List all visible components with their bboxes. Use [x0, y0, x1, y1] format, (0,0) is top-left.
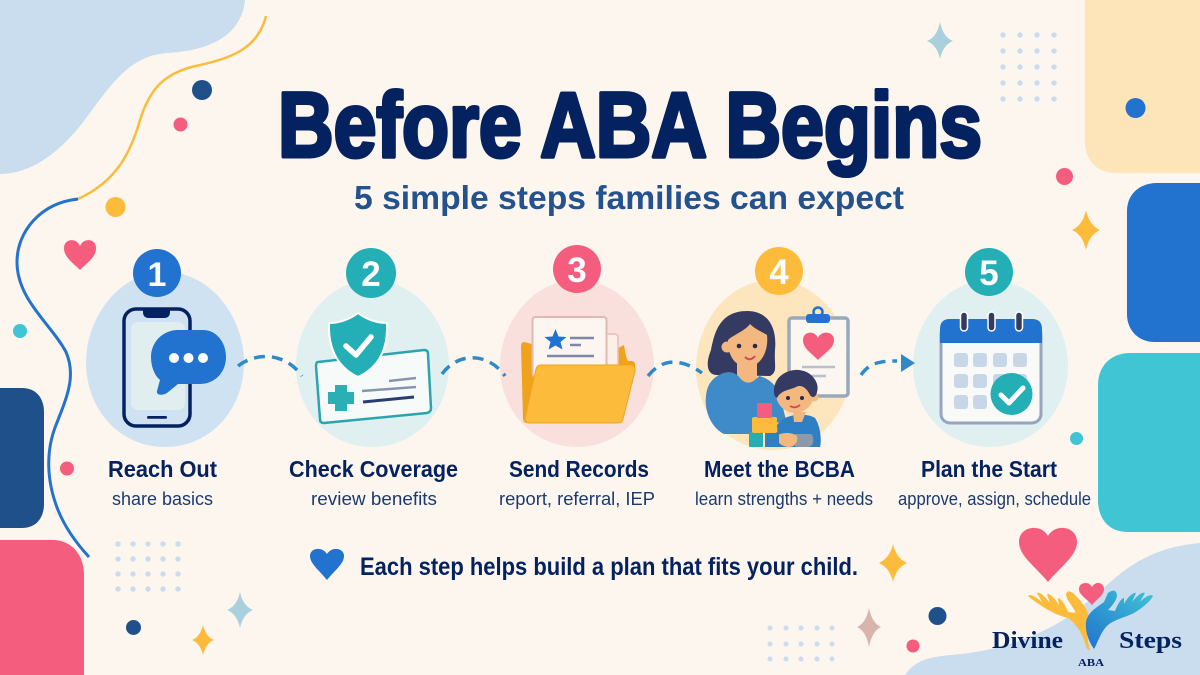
number badge 3 [553, 245, 601, 293]
callout: closing message: Each step helps build a plan that fits your child. [360, 553, 858, 581]
number badge 5 [965, 248, 1013, 296]
step 1 description: share basics [112, 489, 213, 509]
icon: large heart [1019, 528, 1077, 582]
step 4 description: learn strengths + needs [695, 489, 873, 509]
icon: insurance card and shield [316, 313, 431, 423]
step 2 description: review benefits [311, 489, 437, 509]
icon: pink heart left [64, 240, 96, 270]
number badge 4 [755, 247, 803, 295]
step 5 description: approve, assign, schedule [898, 489, 1091, 509]
subtitle: 5 simple steps families can expect [354, 179, 904, 216]
icon: yellow hand [1028, 591, 1090, 650]
logo wordmark: Steps [1119, 628, 1182, 654]
connector arrows [238, 354, 915, 376]
sparkles [192, 22, 1100, 655]
logo: Divine Steps ABA [992, 528, 1182, 669]
number badge 1: 1 [148, 256, 166, 294]
logo wordmark [992, 628, 1182, 669]
step 3 description: report, referral, IEP [499, 489, 655, 509]
icon: folder with records [521, 317, 635, 423]
icon: clipboard with heart [789, 308, 848, 396]
panel: step 3 send records [499, 245, 655, 509]
number badge 2: 2 [361, 255, 381, 294]
panel: step 1 reach out [86, 249, 244, 509]
logo wordmark: ABA [1078, 657, 1104, 669]
icon: small heart [1079, 583, 1104, 605]
dot grids [115, 32, 1057, 662]
icon: blue teal hand [1086, 591, 1153, 649]
number badge 1 [133, 249, 181, 297]
number badge 2 [346, 248, 396, 298]
panel: step 5 plan the start [898, 248, 1091, 509]
logo wordmark: Divine [992, 628, 1063, 654]
step 3 label: Send Records [509, 456, 649, 482]
number badge 3: 3 [567, 251, 587, 290]
step 1 label: Reach Out [108, 456, 217, 482]
title: Before ABA Begins [278, 74, 982, 176]
step 4 label: Meet the BCBA [704, 456, 855, 482]
number badge 5: 5 [979, 254, 999, 293]
panel: step 2 check coverage [289, 248, 458, 509]
icon: calendar with check [940, 312, 1042, 423]
illustration: mother with child [706, 311, 821, 447]
step 2 label: Check Coverage [289, 456, 458, 482]
panel: step 4 meet the bcba [695, 247, 873, 509]
number badge 4: 4 [769, 253, 789, 292]
icon: phone with chat bubble [124, 309, 226, 426]
step 5 label: Plan the Start [921, 456, 1057, 482]
